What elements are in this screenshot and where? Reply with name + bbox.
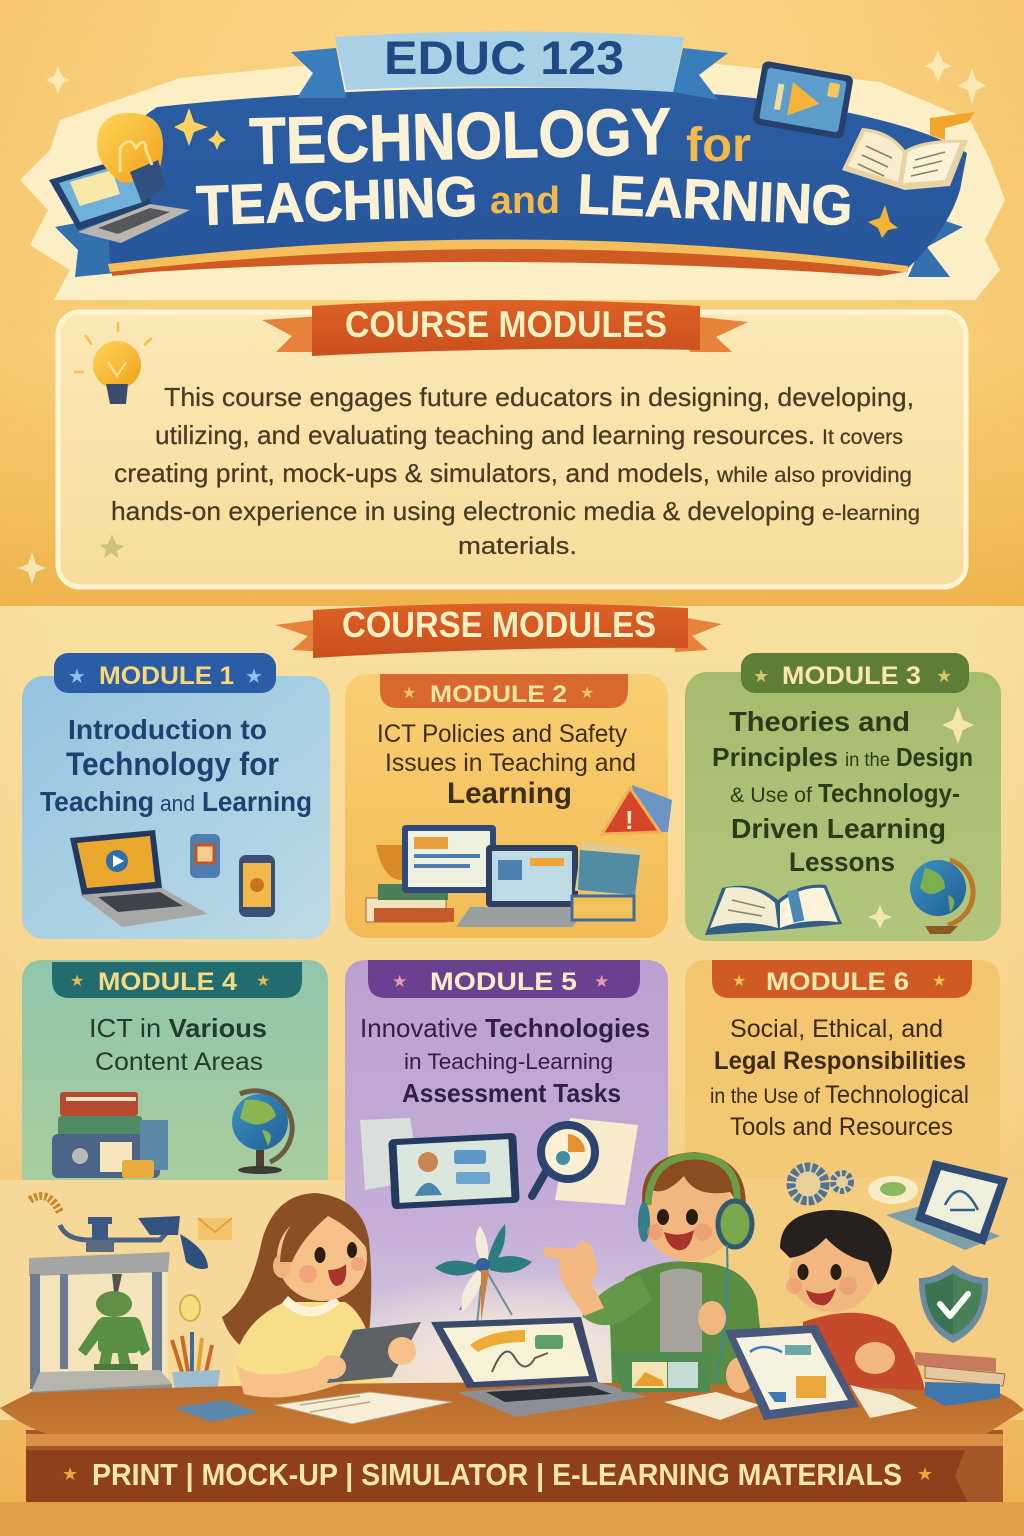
module 1 title: Learning [202,786,312,817]
module 2 header [380,674,628,708]
character: girl [222,1193,385,1385]
module 6 header: ★ [732,973,746,990]
description text: e-learning [822,502,920,525]
right hand [726,1357,754,1393]
icon: magnifier and page [532,1118,638,1205]
background: lower section [0,606,1024,1536]
banner left tail [55,217,125,277]
blue notepad [174,1400,258,1422]
panel: module 2 [345,674,672,938]
module 6 title: Social, Ethical, and [730,1015,943,1043]
icon: warning triangle [602,785,672,835]
scene background right [680,1178,1024,1420]
module 3 title: Principles [712,742,838,772]
girl tablet [327,1322,421,1383]
module 4 header: MODULE 4 [98,968,237,996]
module 1 title: Technology for [66,746,279,782]
icon: globe [232,1091,292,1174]
centre laptop [431,1317,598,1388]
module 6 title: Tools and Resources [730,1113,953,1141]
module 3 title: Technology- [818,778,960,808]
description text: materials. [458,533,577,560]
module 5 title: in Teaching-Learning [404,1049,613,1074]
module 5 header: ★ [594,972,609,991]
icon: security shield [919,1265,988,1343]
banner right tail [908,217,963,277]
banner halo [20,62,1005,300]
decorative stars [100,534,124,558]
description card [58,312,966,587]
module 4 title: Content Areas [95,1048,263,1076]
module 1 title: Teaching [40,786,154,817]
table top [0,1382,1024,1435]
girl arm [236,1362,345,1398]
gold band under banner [108,239,908,272]
course code ribbon [335,32,684,92]
icon: pencil cup [172,1332,220,1404]
right tablet [725,1325,859,1420]
panel: course description [58,312,966,587]
module 3 title [712,706,973,877]
module 1 header: MODULE 1 [99,662,234,690]
icon: laptop with bulb [49,113,190,243]
panel: module 1 [22,653,330,939]
icon: laptop and devices [70,830,275,927]
module 3 title: Lessons [789,847,895,877]
module 2 title [377,720,636,810]
module 2 title: ICT Policies and Safety [377,720,627,748]
props on table [174,1301,1005,1424]
stacked books [915,1352,996,1372]
module 1 header [54,653,276,693]
module 5 title: Innovative Technologies [360,1013,650,1043]
title line 2 left: TEACHING [195,164,478,237]
icon: star [868,205,898,238]
module 6 title: Legal Responsibilities [714,1047,966,1075]
description text: utilizing, and evaluating teaching and learning resources. [155,420,815,450]
table front [26,1430,1003,1502]
course code: EDUC 123 [384,31,624,84]
background: upper section [0,0,1024,606]
star left: ★ [62,1464,78,1484]
module 2 header: ★ [402,685,416,702]
main blue banner [108,88,967,268]
icon: drawing tablet [886,1160,1008,1250]
icon: lightbulb [74,322,152,404]
description text: This course engages future educators in designing, developing, [164,382,914,412]
description text: hands-on experience in using electronic media & developing [111,496,815,526]
icon: warning triangle: ! [625,805,634,835]
cream strip [148,260,876,300]
icon: gears [791,1167,918,1204]
green box [611,1352,712,1392]
small book [664,1392,760,1420]
character: right boy [780,1210,927,1405]
module 1 header: ★ [245,666,263,688]
ribbon: course modules lower [275,603,722,658]
panel: module 5 [345,960,682,1400]
bottom label: PRINT | MOCK-UP | SIMULATOR | E-LEARNING MATERIALS [92,1457,902,1492]
ribbon: course modules lower: COURSE MODULES [342,604,656,645]
panel: module 6 [685,960,1000,1180]
description text: creating print, mock-ups & simulators, and models, [114,458,710,488]
title line 1: TECHNOLOGY [249,94,672,178]
module 2 header: MODULE 2 [430,681,567,708]
description text: while also providing [716,464,912,487]
module 1 title: Introduction to [68,714,267,745]
icon: computers and books [366,825,641,927]
title and: and [490,180,560,222]
title for: for [686,119,751,172]
module 5 header [368,960,640,998]
module 3 title: Theories and [729,706,910,737]
module 6 header: MODULE 6 [766,968,909,996]
module 3 header: MODULE 3 [782,662,921,690]
module 6 title: Technological [825,1081,969,1109]
title line 2 right: LEARNING [576,162,854,237]
header banner [20,31,1005,300]
top ribbon tails [291,48,728,100]
module 1 title: and [160,791,195,816]
icon: open book [705,885,842,935]
module 3 title: Design [896,742,973,772]
icon: open book [842,112,975,190]
table [0,1382,1024,1502]
bottom label band [26,1450,968,1502]
module 6 header: ★ [932,973,946,990]
icon: wind turbine model [435,1224,532,1325]
scene background left [0,1180,346,1420]
module 4 header: ★ [256,973,270,990]
panel: module 3 [685,653,1001,941]
module 3 title: Driven Learning [731,813,946,844]
module 1 header: ★ [68,666,86,688]
open notebook [274,1392,452,1424]
module 4 header [52,962,302,998]
module 5 header: ★ [392,972,407,991]
module 1 title [40,714,312,817]
3D printed robot [78,1291,150,1370]
sparkles [868,706,974,928]
ribbon: course modules top [262,300,748,356]
module 2 title: Learning [447,777,572,810]
notes [850,1385,918,1418]
module 5 title [360,1013,650,1108]
scene centre glow [310,1270,730,1420]
icon: sparkles [174,108,226,150]
module 3 header: ★ [753,666,769,686]
module 6 title [710,1015,969,1141]
character: middle boy with headphones [543,1152,766,1385]
floor wash [0,1502,1024,1536]
icon: video tablet [752,60,854,140]
icon: tablet with video lesson [360,1118,520,1209]
module 4 title [89,1013,267,1076]
module 2 header: ★ [580,685,594,702]
module 4 header: ★ [70,973,84,990]
panel: module 4 [22,960,328,1180]
module 5 title: Assessment Tasks [402,1078,621,1108]
orange band under banner [112,247,905,276]
module 3 header [741,653,969,693]
description text [111,382,920,560]
icon: 3D printer [29,1216,208,1416]
module 6 title: in the Use of [710,1085,820,1108]
module 5 header: MODULE 5 [430,968,577,996]
envelope and bulb accents [30,1196,232,1321]
icon: books [52,1092,168,1178]
decorative side stars [18,50,986,584]
ribbon: course modules top: COURSE MODULES [345,304,667,345]
module 2 title: Issues in Teaching and [385,749,636,777]
module 6 header [712,960,972,998]
module 4 title: ICT in Various [89,1013,267,1043]
module 3 header: ★ [936,666,952,686]
module 3 title: in the [845,750,890,771]
module 3 title: & Use of [730,784,812,807]
star right: ★ [917,1464,933,1484]
description text: It covers [822,426,903,449]
icon: globe [910,860,973,934]
